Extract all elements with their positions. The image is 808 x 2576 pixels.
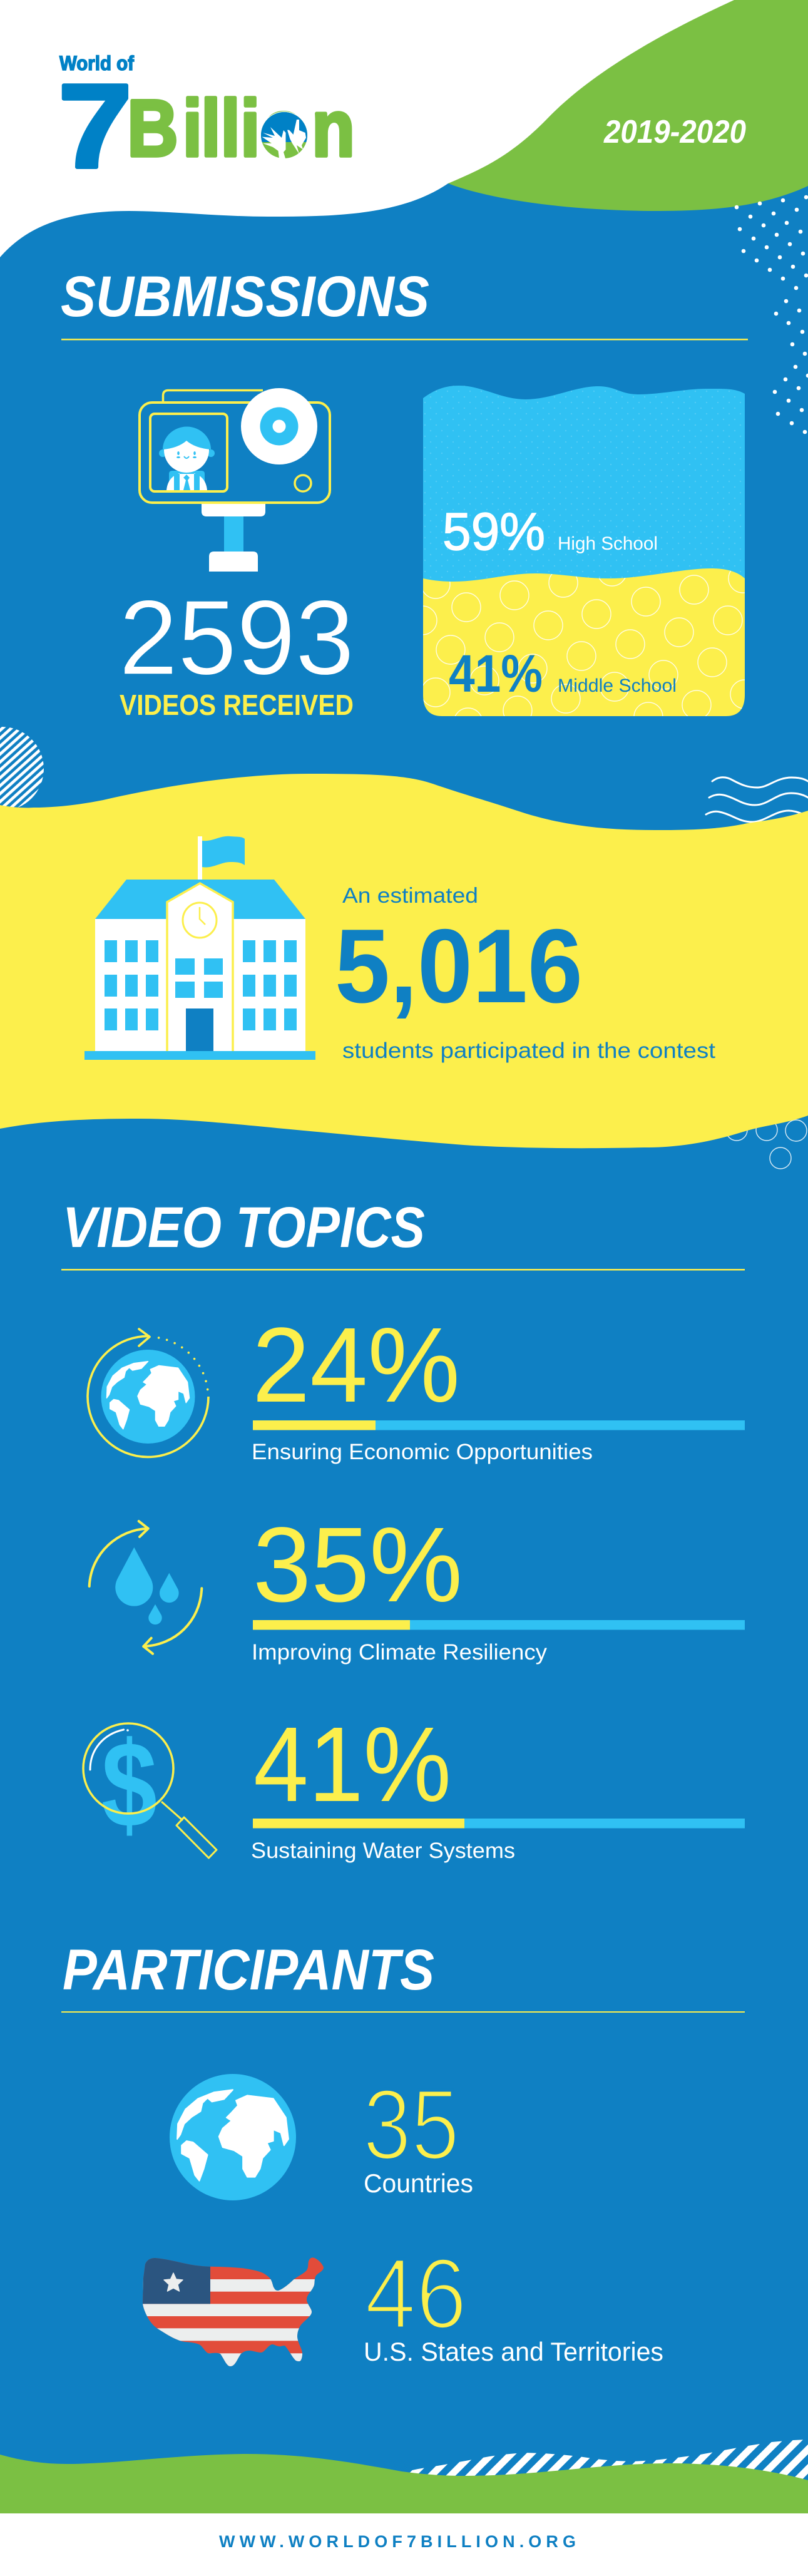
stat: 46 states: 46: [365, 2237, 467, 2349]
yellow band: [0, 774, 808, 1148]
logo numeral: 7: 7: [58, 60, 132, 193]
stat: 41%: 41%: [449, 644, 543, 703]
topic row: climate resiliency: [89, 1506, 745, 1665]
bar: 41%: [253, 1819, 745, 1828]
camera screen with student: [150, 414, 227, 491]
logo globe with hands: [260, 111, 308, 159]
magnifier lens: [83, 1723, 173, 1814]
magnifier glare: [90, 1730, 124, 1770]
icon: US map flag: [143, 2257, 324, 2366]
windows: [105, 940, 297, 1030]
label: high school: High School: [558, 533, 658, 554]
logo text: World of: World of: [59, 52, 134, 74]
footer white bar: [0, 2513, 808, 2576]
decorative outline circles: [726, 1119, 807, 1169]
dollar sign: $: [101, 1716, 157, 1853]
panel: school level split: [423, 386, 745, 716]
roof: [95, 880, 305, 919]
heading: video topics: VIDEO TOPICS: [63, 1196, 425, 1260]
stat: 35 countries: 35: [363, 2068, 459, 2180]
bar: 24%: [253, 1420, 745, 1430]
label: countries: Countries: [364, 2168, 473, 2198]
logo word: Billion: Billion: [127, 83, 355, 173]
central tower: [167, 883, 233, 1051]
label: middle school: Middle School: [558, 675, 677, 696]
camera mount: [202, 504, 265, 516]
label: videos received: VIDEOS RECEIVED: [120, 689, 354, 721]
magnifier handle: [161, 1802, 217, 1858]
decorative striped circle: [0, 727, 44, 811]
decorative footer stripes: [406, 2440, 808, 2485]
camera back plate: [163, 391, 263, 401]
stat: 59%: 59%: [442, 502, 545, 561]
middle school region: [423, 568, 745, 716]
decorative wave lines: [706, 777, 808, 822]
heading: participants: PARTICIPANTS: [63, 1938, 434, 2002]
icon: action camera with student: [140, 388, 330, 572]
label: us states and territories: U.S. States and Territories: [364, 2337, 663, 2366]
year label: 2019-2020: [603, 114, 746, 150]
label: ensuring economic opportunities: Ensuring Economic Opportunities: [252, 1440, 593, 1464]
stat: 41%: 41%: [253, 1705, 451, 1824]
decorative white dots: [735, 195, 808, 434]
heading: submissions: SUBMISSIONS: [61, 265, 429, 329]
icon: school building: [84, 836, 315, 1060]
camera lens: [241, 388, 317, 464]
green corner wave: [448, 0, 808, 211]
topic row: water systems: [83, 1705, 745, 1863]
clock: [183, 903, 217, 938]
camera pole: [224, 516, 243, 552]
camera base: [209, 552, 258, 572]
footer url: WWW.WORLDOF7BILLION.ORG: [219, 2532, 576, 2551]
text: an estimated: An estimated: [342, 884, 478, 908]
building walls: [95, 919, 305, 1051]
flag pole: [198, 836, 202, 884]
base step: [84, 1051, 315, 1060]
icon: dollar under magnifying glass: [83, 1716, 217, 1858]
label: sustaining water systems: Sustaining Water Systems: [251, 1839, 515, 1863]
stat: 2593: 2593: [119, 578, 354, 697]
high school region: [423, 386, 745, 588]
logo: World of 7 Billion: [59, 55, 352, 169]
stat: 5,016: 5,016: [335, 907, 583, 1025]
label: improving climate resiliency: Improving Climate Resiliency: [252, 1640, 548, 1665]
green footer wave: [0, 2454, 808, 2513]
icon: water drops with arrows: [89, 1521, 202, 1654]
topic row: economic opportunities: [88, 1306, 745, 1464]
door: [186, 1008, 213, 1051]
icon: earth globe: [170, 2074, 296, 2200]
flag star: [164, 2273, 183, 2291]
stat: 35%: 35%: [253, 1506, 463, 1624]
text: students participated: students participated in the contest: [342, 1039, 715, 1063]
bar: 35%: [253, 1620, 745, 1630]
stat: 24%: 24%: [252, 1306, 460, 1425]
camera body: [140, 403, 330, 503]
icon: globe with arrow ring: [88, 1329, 208, 1457]
flag: [202, 836, 245, 868]
camera button: [295, 475, 311, 491]
